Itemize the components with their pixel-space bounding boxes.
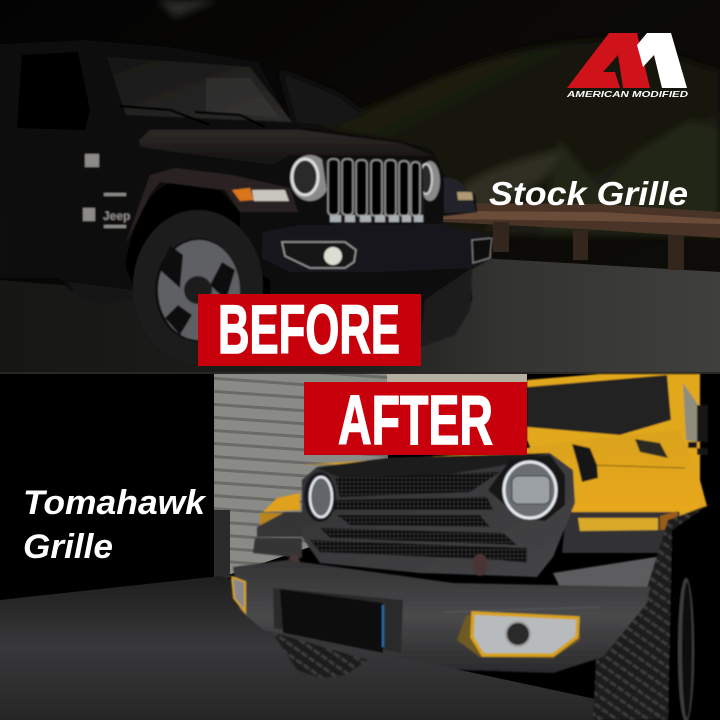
Tomahawk grille xyxy=(302,453,575,577)
seven-slot grille xyxy=(322,159,425,224)
garage floor xyxy=(0,576,600,720)
license plate cover xyxy=(273,588,403,653)
right headlight xyxy=(488,455,565,521)
headlights xyxy=(290,155,330,201)
right fog lamp xyxy=(457,612,580,658)
panel: before photo xyxy=(0,0,720,372)
caption: Stock Grille: Stock Grille xyxy=(489,175,688,212)
hood latch xyxy=(572,444,598,482)
front wheel xyxy=(133,210,263,364)
front bumper xyxy=(262,224,492,272)
label: BEFORE: BEFORE xyxy=(218,291,400,368)
fender xyxy=(125,168,298,245)
left fog lamp xyxy=(232,577,245,612)
divider xyxy=(0,372,720,374)
logo: American Modified xyxy=(566,33,688,99)
label: AFTER: AFTER xyxy=(338,381,493,459)
jeep body xyxy=(0,40,492,365)
windshield xyxy=(107,57,292,122)
left tire xyxy=(272,632,368,678)
rear wheels xyxy=(68,282,135,305)
caption: Tomahawk Grille xyxy=(23,484,207,566)
right trim xyxy=(562,512,680,553)
left fender xyxy=(263,493,300,512)
right DRL xyxy=(578,518,658,531)
yellow truck xyxy=(232,374,708,720)
fog lamp xyxy=(282,242,356,268)
panel: after photo xyxy=(0,374,720,720)
mirror xyxy=(688,405,708,455)
stock jeep xyxy=(0,40,492,365)
front bumper xyxy=(233,560,650,673)
left headlight xyxy=(304,472,336,522)
logo: American Modified: AMERICAN MODIFIED xyxy=(566,90,688,99)
mountains and hillside xyxy=(158,0,720,235)
side mirror marker xyxy=(444,177,476,213)
left trim xyxy=(253,512,302,558)
roof and cab xyxy=(527,374,700,520)
right tire xyxy=(593,505,708,720)
side window xyxy=(683,383,697,442)
label: BEFORE xyxy=(198,291,421,368)
wipers xyxy=(120,106,265,127)
hood xyxy=(139,130,434,165)
garage door xyxy=(214,374,388,580)
door badges xyxy=(83,154,130,228)
caption: Tomahawk Grille: Grille xyxy=(23,528,113,566)
road xyxy=(0,258,720,372)
side window xyxy=(17,52,90,130)
caption: Tomahawk Grille: Tomahawk xyxy=(23,484,207,522)
hood xyxy=(300,430,708,510)
door badges: Jeep xyxy=(103,209,130,223)
guard rail xyxy=(443,203,720,270)
hood vent xyxy=(635,439,668,458)
windshield xyxy=(527,375,671,435)
left amber light xyxy=(260,513,282,525)
marker lights xyxy=(288,554,300,574)
turn signal and DRL xyxy=(232,188,254,201)
